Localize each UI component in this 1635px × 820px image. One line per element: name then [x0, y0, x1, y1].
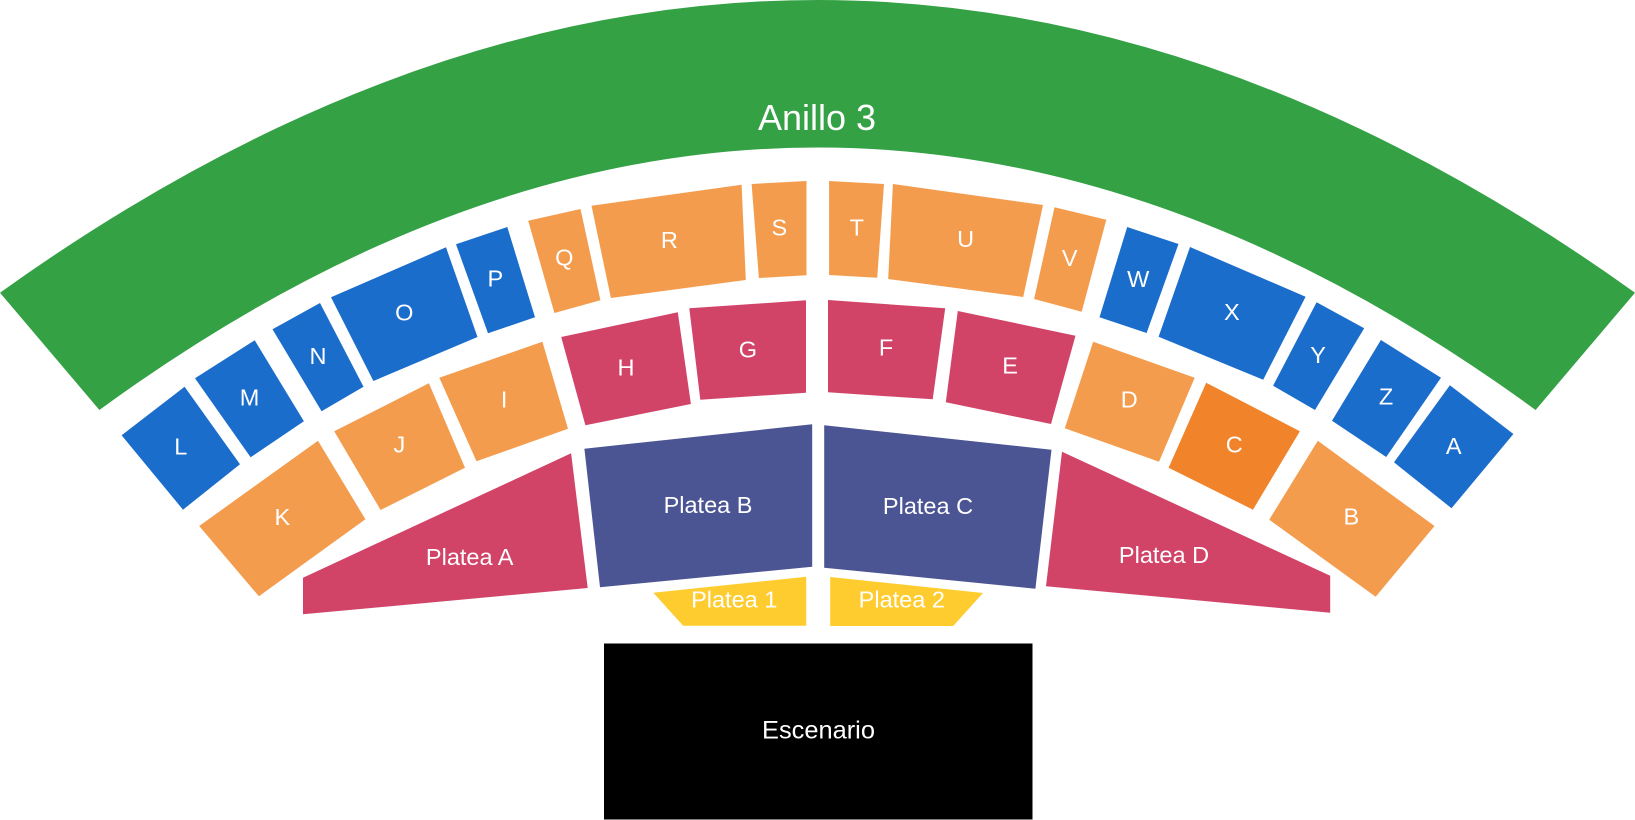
- section: Platea A: [303, 453, 588, 614]
- section: S: S: [771, 215, 787, 241]
- section: L: [122, 387, 240, 510]
- section: U: U: [957, 226, 974, 252]
- section: X: [1159, 247, 1306, 380]
- section: E: E: [1002, 352, 1018, 378]
- section: F: [828, 300, 945, 399]
- section: Platea C: Platea C: [883, 493, 973, 519]
- section: W: [1100, 227, 1178, 333]
- section: V: [1034, 207, 1106, 312]
- section: O: O: [395, 300, 413, 326]
- section: K: [199, 441, 365, 596]
- section: Platea D: Platea D: [1119, 542, 1209, 568]
- section: Y: [1273, 302, 1364, 410]
- section: K: K: [274, 504, 290, 530]
- section: H: H: [618, 355, 634, 381]
- section: A: A: [1446, 433, 1462, 459]
- section: D: [1065, 342, 1195, 462]
- section: Platea 1: [653, 577, 806, 626]
- section: Platea D: [1046, 452, 1330, 613]
- section: Platea 2: Platea 2: [859, 587, 945, 613]
- section: J: J: [394, 432, 405, 458]
- stage: Escenario: Escenario: [762, 716, 875, 744]
- section: O: [331, 247, 478, 381]
- section: Platea B: [584, 424, 812, 587]
- section: L: L: [174, 434, 187, 460]
- section: T: T: [850, 215, 864, 241]
- section: R: [592, 185, 746, 298]
- section: A: [1394, 385, 1513, 508]
- section: Z: Z: [1379, 384, 1393, 410]
- section: X: X: [1224, 299, 1240, 325]
- section: Q: [528, 209, 600, 313]
- section: E: [946, 311, 1076, 424]
- section: T: [829, 181, 884, 278]
- section: S: [752, 181, 806, 278]
- section: P: P: [487, 266, 503, 292]
- section: H: [561, 312, 691, 425]
- section: R: R: [661, 227, 678, 253]
- section: Platea 1: Platea 1: [691, 587, 777, 613]
- section: W: W: [1127, 266, 1150, 292]
- section: J: [334, 383, 465, 510]
- section: F: F: [879, 335, 893, 361]
- section: M: M: [240, 385, 259, 411]
- section: C: C: [1226, 432, 1243, 458]
- section: U: [888, 184, 1043, 297]
- section: G: G: [739, 336, 757, 362]
- section: D: D: [1121, 386, 1138, 412]
- section: G: [689, 300, 806, 400]
- section: N: N: [310, 343, 326, 369]
- section: Platea B: Platea B: [664, 492, 752, 518]
- section: P: [456, 227, 535, 333]
- section: Anillo 3: Anillo 3: [758, 97, 876, 138]
- section: Platea C: [824, 425, 1052, 589]
- stage: Escenario: [604, 644, 1032, 820]
- section: C: [1169, 383, 1300, 510]
- section: I: [439, 342, 568, 461]
- section: B: [1269, 441, 1434, 597]
- section: Platea 2: [830, 577, 983, 626]
- section: B: B: [1343, 504, 1359, 530]
- section: Z: [1332, 340, 1441, 457]
- section: Q: Q: [555, 244, 573, 270]
- section: M: [195, 340, 304, 457]
- section: I: I: [501, 386, 507, 412]
- section: N: [272, 303, 364, 411]
- section: Platea A: Platea A: [426, 544, 514, 570]
- section: Y: Y: [1310, 342, 1326, 368]
- section: V: V: [1062, 245, 1078, 271]
